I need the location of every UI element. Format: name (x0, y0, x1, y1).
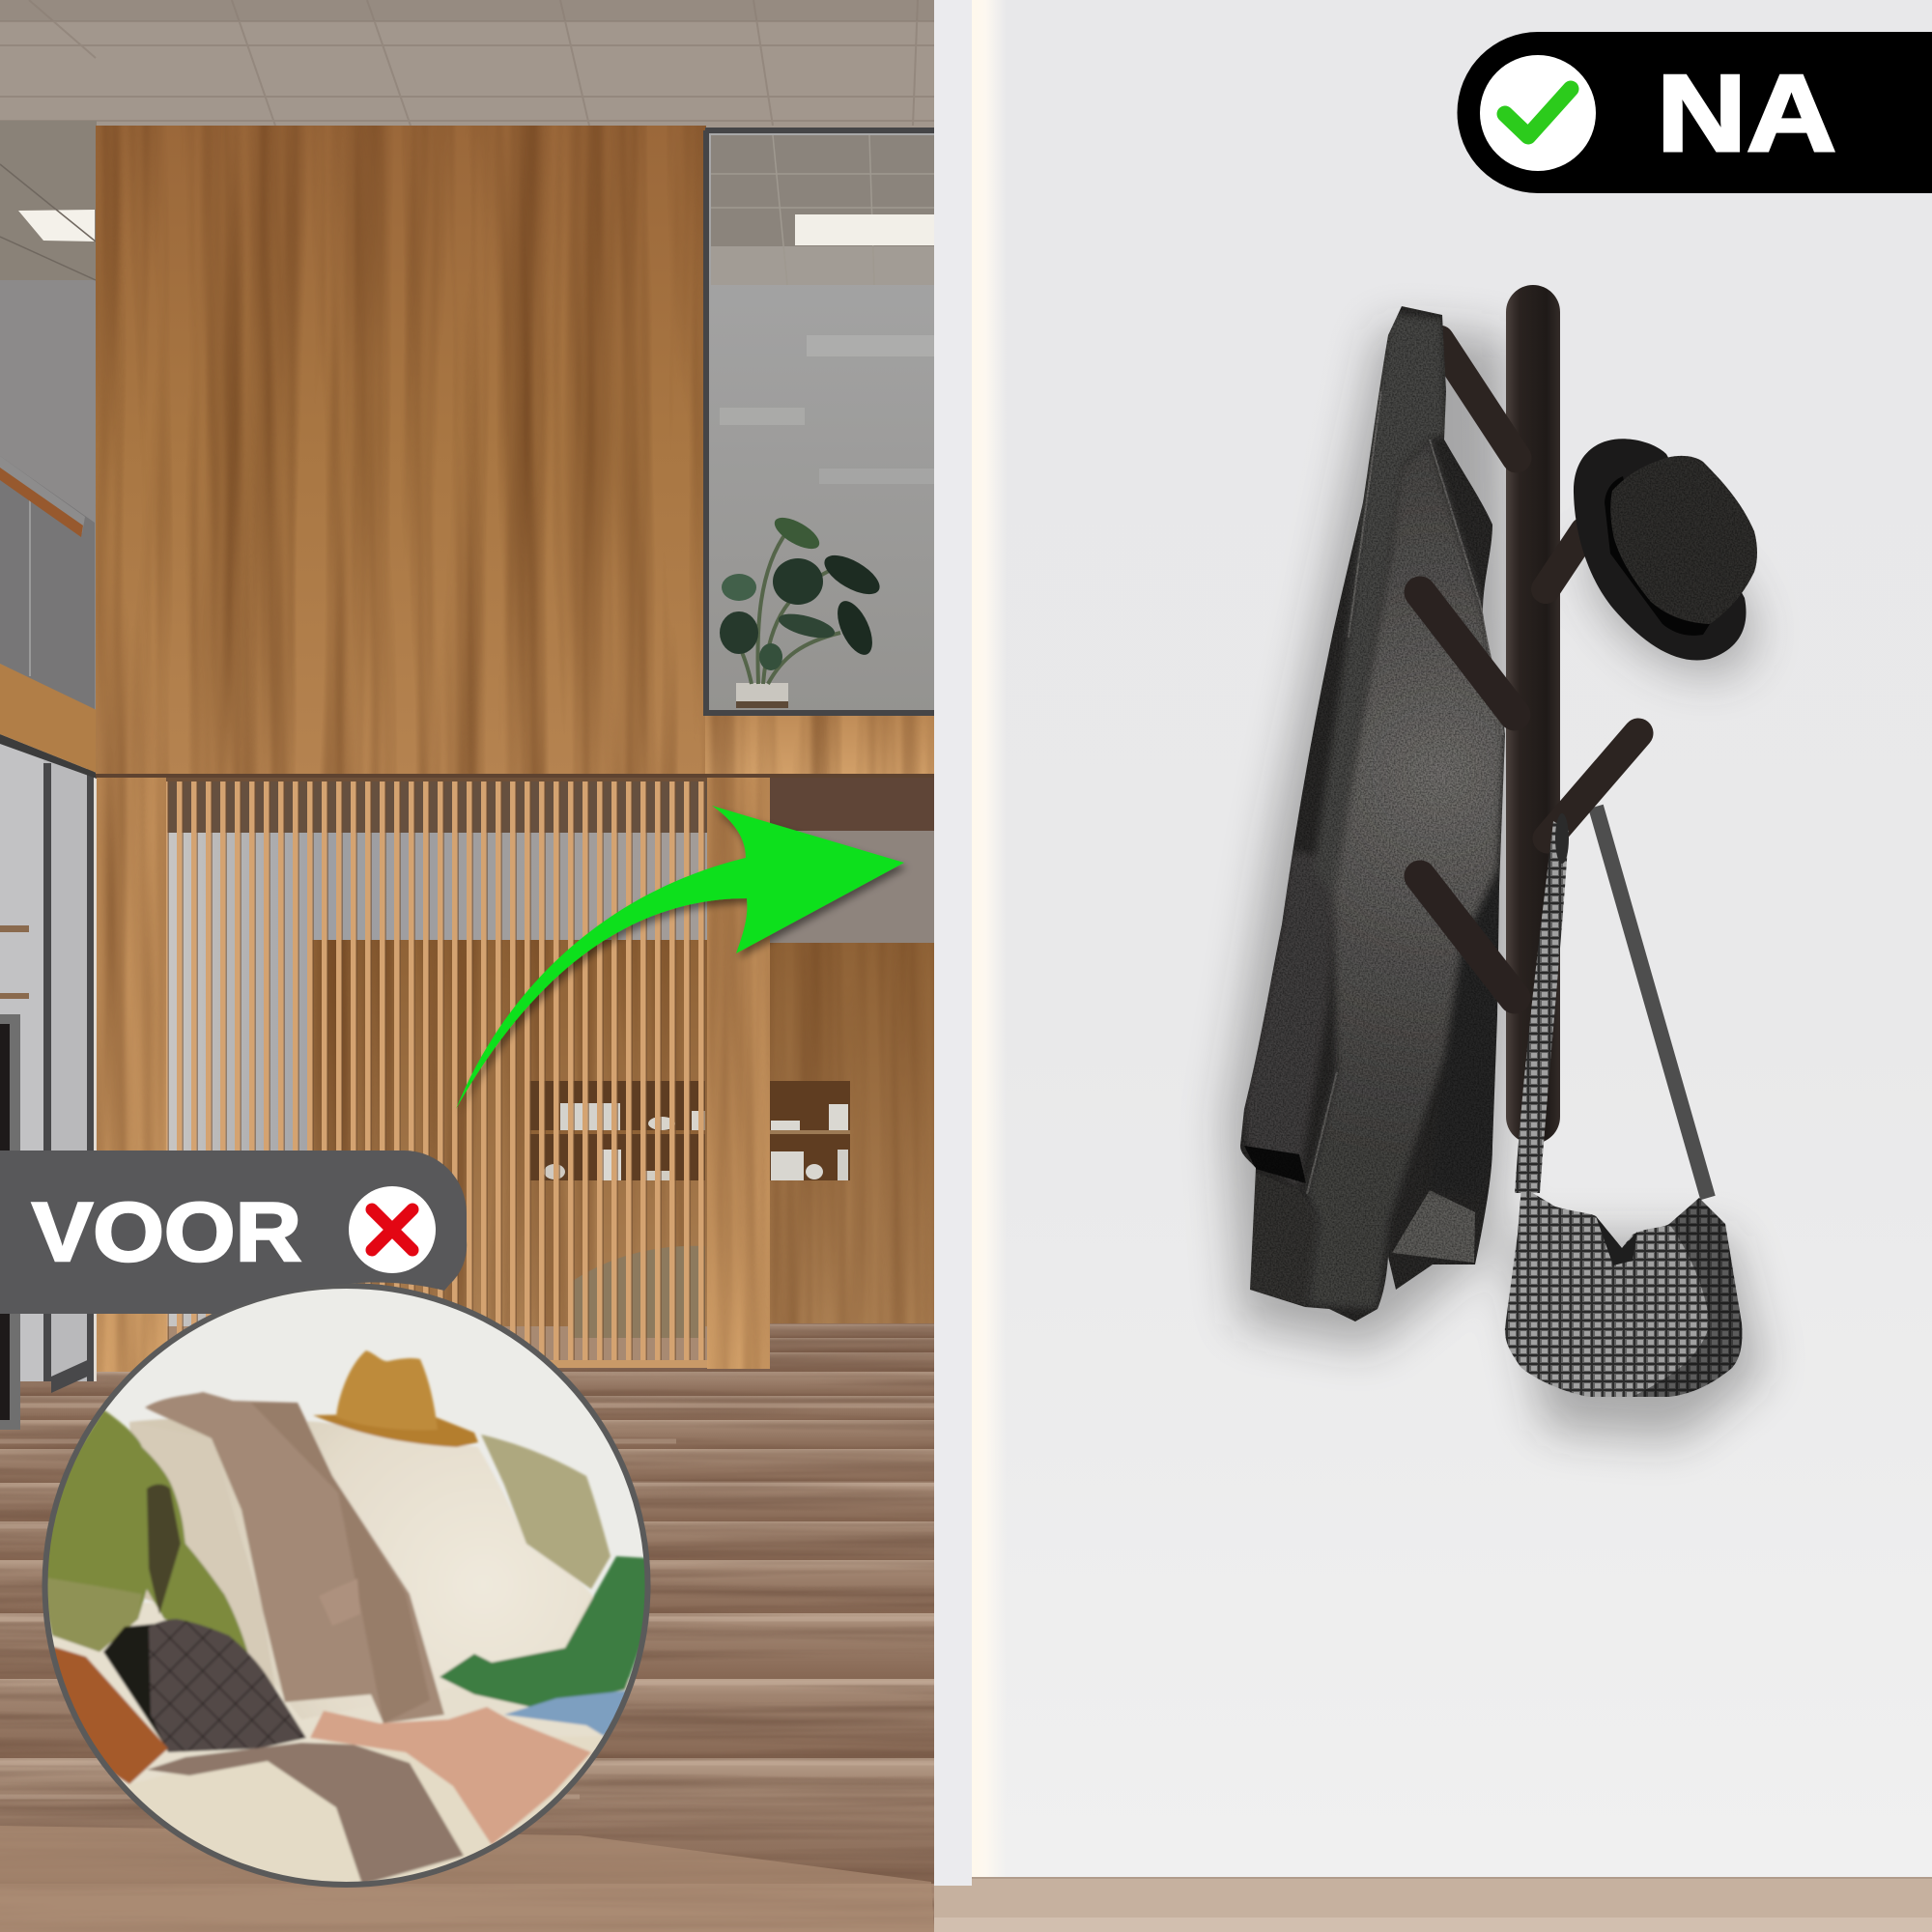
jacket pocket (319, 1578, 360, 1626)
sage jacket (481, 1435, 611, 1589)
rack peg right lower (1548, 733, 1638, 838)
floor after (934, 1877, 1932, 1932)
wall edge strip (934, 0, 972, 1886)
circle border (44, 1286, 647, 1885)
wood band under railing (0, 664, 97, 773)
olive sweater (39, 1409, 250, 1661)
peach throw (310, 1707, 591, 1845)
left upper background (0, 121, 97, 734)
shoulder bag (1505, 813, 1742, 1397)
wood columns (97, 778, 770, 1372)
NA label: NA (1657, 52, 1836, 174)
tan clutch (39, 1642, 168, 1784)
glass railing with handrail (0, 456, 95, 710)
hat crown (1610, 456, 1757, 624)
quilted bag (149, 1619, 306, 1752)
jacket left sleeve (1244, 850, 1338, 1190)
badge shape (1457, 32, 1932, 193)
messy sofa illustration (39, 1350, 657, 1893)
cream foreground blanket (97, 1736, 618, 1893)
hat brim (1574, 439, 1747, 660)
sofa base (39, 1594, 657, 1893)
back wall behind slats (166, 779, 707, 1362)
ceiling (0, 0, 934, 128)
jacket highlight edges (1307, 391, 1503, 1194)
before inset circle photo (39, 1286, 657, 1893)
drop shadows (1227, 328, 1782, 1439)
rack peg left top (1439, 340, 1517, 458)
rack peg right upper (1546, 531, 1584, 589)
bag body (1505, 1186, 1742, 1397)
green shirt (440, 1556, 649, 1709)
bag dent (1596, 1216, 1637, 1265)
jacket (1236, 299, 1512, 1328)
bag left strap (1515, 821, 1569, 1193)
panel: white wall after scene (934, 0, 1932, 1932)
jacket dark cuff (1250, 1171, 1319, 1306)
sofa back (129, 1418, 591, 1719)
bag fold shadow (1633, 1198, 1742, 1397)
NA badge (1457, 32, 1932, 193)
VOOR badge (0, 1151, 467, 1314)
jacket front panel (1307, 440, 1505, 1309)
bag knot on peg (1555, 813, 1569, 864)
hat band (1605, 476, 1710, 636)
black bag rear (103, 1623, 177, 1745)
warm light glow (972, 0, 1007, 1877)
sweater rib (39, 1577, 142, 1652)
panel: office interior before scene (0, 0, 934, 1932)
back room right (770, 778, 934, 1323)
jacket right cuff (1392, 1190, 1475, 1263)
jacket middle layer (1314, 314, 1446, 898)
rack peg left bottom (1420, 876, 1515, 998)
jacket back sleeve dark (1430, 869, 1502, 1198)
jacket fold (251, 1403, 430, 1723)
jacket inner black lining (1244, 1146, 1306, 1183)
hat (1574, 439, 1757, 660)
icon: potted monstera plant (720, 511, 886, 708)
badge shape (0, 1151, 467, 1314)
denim (504, 1690, 628, 1736)
wood beam (96, 716, 934, 778)
upper window with plant (703, 130, 934, 716)
circle background (44, 1286, 647, 1885)
coat rack with clothes (1227, 285, 1782, 1439)
slatted screen (166, 776, 707, 1368)
left lower glass wall (0, 734, 97, 1430)
icon: red cross in white circle (349, 1186, 436, 1273)
green arrow (456, 806, 904, 1109)
wooden floor (0, 1319, 934, 1932)
left cushion (129, 1422, 280, 1719)
wood wall panel (96, 126, 706, 775)
brown jacket (145, 1392, 444, 1723)
jacket base (1236, 299, 1512, 1328)
sweater fold (147, 1484, 181, 1614)
armchair behind slats (570, 1246, 705, 1338)
VOOR label: VOOR (32, 1186, 301, 1279)
bookshelf right (770, 1081, 850, 1180)
bag right strap (1596, 807, 1708, 1198)
wall (934, 0, 1932, 1879)
taupe blanket (147, 1743, 464, 1885)
bookshelf behind slats (526, 1081, 705, 1180)
icon: green check in white circle (1480, 55, 1596, 171)
tan hat (313, 1350, 478, 1447)
rack peg left middle (1420, 592, 1515, 715)
rack pole (1506, 285, 1560, 1144)
